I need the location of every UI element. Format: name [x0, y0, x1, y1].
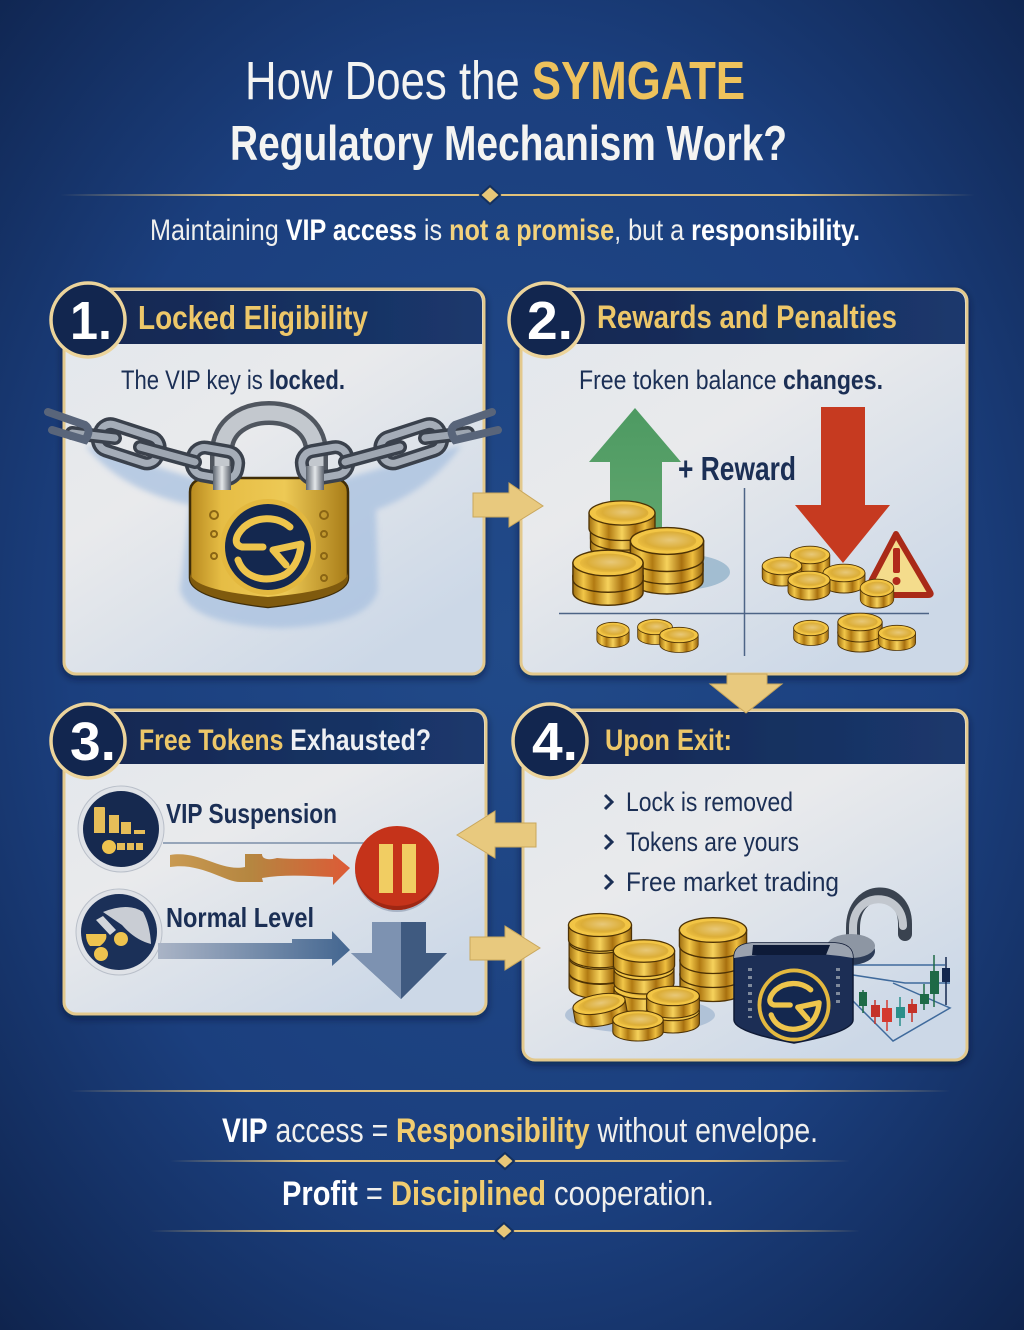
- panel 1: locked eligibility: [48, 283, 498, 674]
- panel 2 heading: Rewards and Penalties: [597, 299, 897, 335]
- icon: bottom left coins: [597, 619, 698, 652]
- panel 4 number badge: [513, 704, 587, 778]
- panel 1 text: The VIP key is locked.: [121, 365, 345, 395]
- icon: bottom right coins: [794, 613, 916, 652]
- chart: candlesticks: [852, 955, 950, 1041]
- panel 2 number badge: 2.: [527, 291, 573, 351]
- icon: pause button: [355, 826, 439, 912]
- panel 1 heading: Locked Eligibility: [138, 299, 369, 336]
- panel 2: rewards and penalties: [509, 283, 967, 674]
- panel 3: free tokens exhausted: [51, 704, 486, 1014]
- line to pause: [163, 842, 366, 844]
- label: reward: + Reward: [678, 450, 796, 487]
- icon: suspension badge: [78, 786, 164, 872]
- arrow: panel 4 to panel 3: [457, 811, 536, 858]
- label: normal level: Normal Level: [166, 902, 314, 933]
- exit list: Lock is removed: [626, 787, 793, 817]
- label: VIP suspension: VIP Suspension: [166, 798, 337, 829]
- panel 4: upon exit: [513, 704, 967, 1060]
- exit list: [605, 787, 839, 897]
- footer divider top: [70, 1090, 950, 1092]
- panel 1 number badge: [51, 283, 125, 357]
- footer line 2: Profit = Disciplined cooperation.: [282, 1175, 714, 1213]
- panel 3 number badge: [51, 704, 125, 778]
- footer line 1: VIP access = Responsibility without envelope.: [222, 1112, 818, 1150]
- title: Regulatory Mechanism Work?: [230, 117, 787, 171]
- icon: red down arrow: [795, 407, 890, 563]
- exit list: Tokens are yours: [626, 827, 799, 857]
- footer divider bottom: [150, 1223, 860, 1239]
- title: [230, 51, 787, 171]
- chart axes: [559, 488, 929, 656]
- panel 2 text: Free token balance changes.: [579, 365, 883, 395]
- panel 2 number badge: [509, 283, 583, 357]
- panel 2 card: [521, 289, 967, 674]
- arrow: wavy to pause: [170, 854, 350, 885]
- arrow: panel 1 to panel 2: [473, 483, 543, 527]
- icon: down arrow: [351, 922, 447, 999]
- title divider: [60, 186, 975, 204]
- panel 4 card: [523, 710, 967, 1060]
- icon: green up arrow: [589, 408, 681, 530]
- panel 1 card: [64, 289, 484, 674]
- icon: reward coin stacks: [573, 501, 730, 605]
- arrow: panel 3 to panel 4: [470, 926, 540, 970]
- icon: padlock with chain: [48, 412, 498, 628]
- subtitle: Maintaining VIP access is not a promise, but a responsibility.: [150, 214, 860, 247]
- footer divider middle: [170, 1153, 850, 1169]
- icon: coin piles: [565, 913, 747, 1041]
- arrow: to normal level: [158, 931, 350, 966]
- panel 4 number badge: 4.: [532, 712, 578, 772]
- arrow: panel 2 to panel 4: [710, 674, 782, 713]
- panel 3 heading: Free Tokens Exhausted?: [139, 724, 431, 757]
- icon: normal level badge: [76, 889, 162, 975]
- icon: open padlock: [734, 894, 905, 1043]
- panel 3 number badge: 3.: [70, 712, 116, 772]
- panel 4 heading: Upon Exit:: [605, 724, 732, 757]
- icon: penalty coins: [762, 546, 894, 608]
- panel 3 card: [64, 710, 486, 1014]
- exit list: Free market trading: [626, 867, 839, 897]
- title: How Does the SYMGATE: [245, 51, 745, 111]
- panel 1 number badge: 1.: [70, 291, 112, 351]
- icon: warning triangle: [865, 534, 931, 595]
